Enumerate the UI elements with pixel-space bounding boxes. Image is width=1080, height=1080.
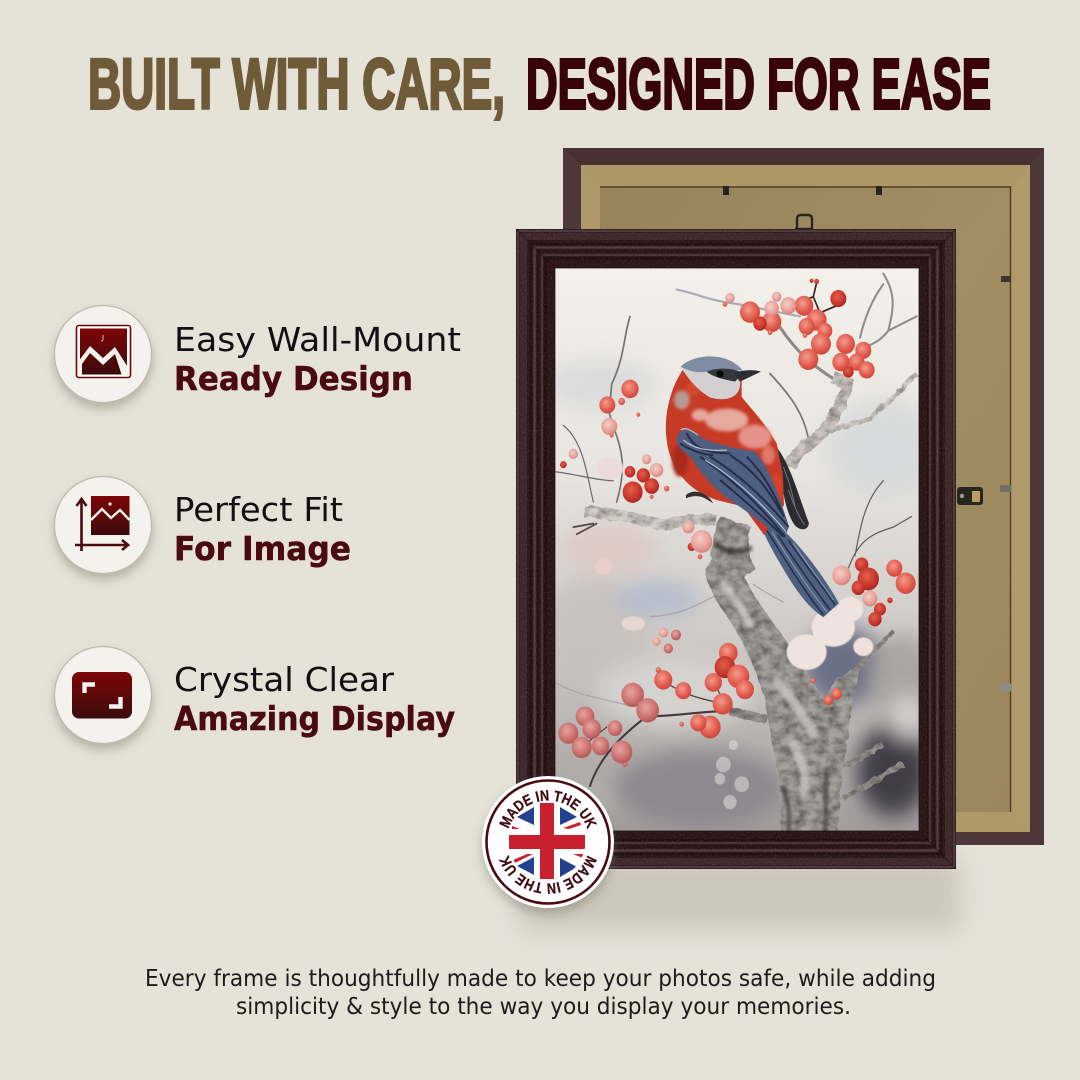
painting: bird on berry branch — [555, 268, 919, 831]
bird dark outer feathers — [778, 448, 809, 530]
back of frame — [563, 148, 1044, 845]
feature: perfect fit — [54, 476, 351, 574]
grey clip — [1000, 485, 1011, 492]
painting thin twigs — [555, 274, 917, 786]
turn clip — [723, 186, 729, 195]
badge text top: MADE IN THE UK — [499, 790, 598, 830]
front frame shadow — [520, 858, 960, 930]
title part one: BUILT WITH CARE, — [88, 46, 505, 124]
painting bark highlights — [717, 545, 827, 834]
icon badge: wall mount — [54, 306, 152, 402]
painting bird — [666, 356, 839, 617]
artwork inner shadow — [555, 268, 919, 831]
bird beak — [734, 370, 761, 382]
bird red body — [666, 367, 784, 535]
icon badge: perfect fit — [54, 476, 152, 574]
bird blue wing — [677, 430, 789, 539]
badge text bottom: MADE IN THE UK — [498, 854, 597, 894]
painting bokeh dots — [715, 740, 749, 809]
footer line one: Every frame is thoughtfully made to keep your photos safe, while adding — [145, 966, 936, 992]
text: for image: For Image — [174, 529, 351, 568]
footer line two: simplicity & style to the way you display your memories. — [236, 994, 851, 1020]
text: easy wall-mount: Easy Wall-Mount — [174, 320, 461, 359]
bird eye — [716, 370, 724, 378]
turn clip — [876, 186, 882, 195]
bird tail — [764, 528, 839, 618]
text: ready design: Ready Design — [174, 359, 413, 398]
features list — [54, 306, 461, 744]
footer text — [145, 966, 936, 1020]
text: crystal clear: Crystal Clear — [174, 660, 394, 699]
bird feet — [686, 492, 713, 503]
painting pale blossoms — [595, 457, 873, 670]
hanger bracket — [957, 487, 983, 505]
side clip — [1001, 276, 1010, 282]
grey clip — [1000, 683, 1011, 692]
framed artwork — [516, 229, 956, 869]
painting trunk and main branches — [583, 374, 917, 838]
bird grey head — [681, 357, 743, 399]
icon badge: crystal clear — [54, 646, 152, 744]
text: perfect fit: Perfect Fit — [174, 490, 343, 529]
painting wash — [556, 358, 919, 830]
feature: wall mount — [54, 306, 461, 402]
text: amazing display: Amazing Display — [174, 699, 455, 738]
feature: crystal clear — [54, 646, 455, 744]
wooden frame — [516, 229, 956, 869]
union jack — [509, 803, 585, 879]
hanger ring — [795, 215, 813, 229]
made in the uk badge — [477, 776, 618, 918]
title — [88, 46, 991, 124]
painting berries — [558, 279, 916, 767]
